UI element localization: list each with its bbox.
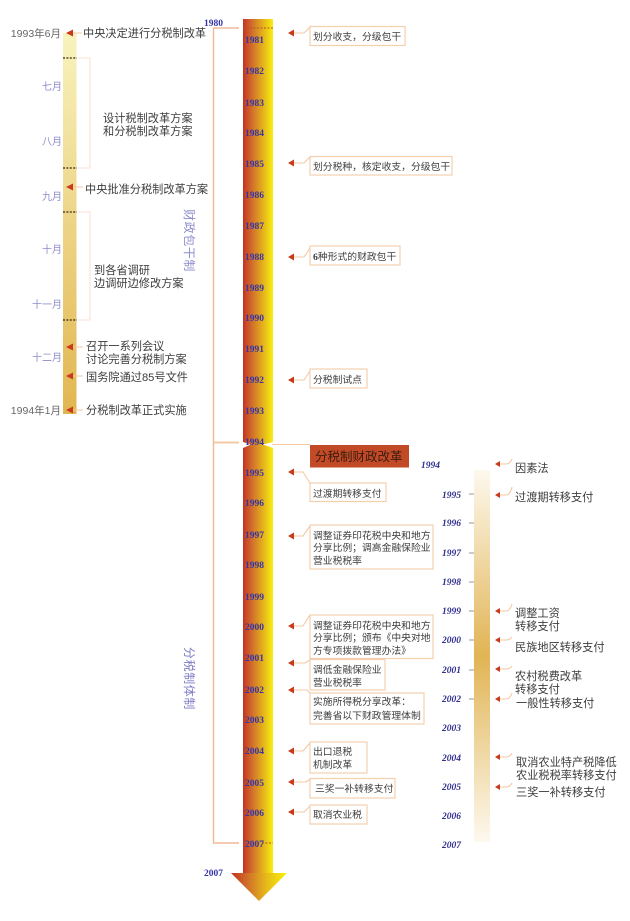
left date labels: 七月 [42,81,62,93]
main timeline year labels: 1982 [245,67,264,77]
left date labels: 1993年6月 [11,27,61,40]
callout: 2000: 调整证券印花税中央和地方 [313,619,431,632]
main timeline arrow [231,19,287,901]
heading: 分税制财政改革 [310,445,409,468]
callout: 1995 [310,483,386,502]
main timeline year labels: 1989 [245,284,264,294]
main timeline year labels: 1984 [245,129,264,139]
callout: 2002: 实施所得税分享改革： [313,695,411,708]
left date labels: 九月 [42,191,62,203]
right event texts [515,461,617,799]
callout: 1995: 过渡期转移支付 [313,487,382,500]
left event texts [83,26,208,417]
main timeline year labels: 2003 [245,716,264,726]
right event texts: 调整工资 [515,606,560,620]
left event texts: 国务院通过85号文件 [86,370,188,384]
callout: 1981 [310,26,405,46]
right timeline year labels: 1996 [442,519,461,529]
right timeline year labels: 1995 [442,491,461,501]
callout: 2000: 方专项拨款管理办法》 [313,644,411,657]
right timeline year labels: 2006 [441,812,461,822]
callout: 1988 [310,246,400,265]
main timeline year labels: 2002 [245,686,264,696]
era bracket [214,28,239,843]
callout: 1997 [310,525,433,569]
main timeline year labels: 2000 [245,623,264,633]
callout: 1985: 划分税种，核定收支，分级包干 [313,160,450,173]
left event texts: 分税制改革正式实施 [86,403,187,417]
era label: 财政包干制: 财政包干制 [182,209,196,272]
left event texts: 到各省调研 [94,263,150,277]
main timeline year labels: 1980 [204,19,223,29]
main timeline year labels: 1981 [245,36,264,46]
main timeline year labels: 2007 [204,869,223,879]
left event markers [66,30,83,414]
callout: 2004 [310,742,367,773]
left event texts: 和分税制改革方案 [103,124,193,138]
left date labels: 1994年1月 [11,404,61,417]
main timeline year labels: 2007 [245,840,264,850]
left date labels: 十二月 [32,351,62,364]
right timeline year labels: 2007 [441,841,462,851]
right timeline year labels: 2002 [441,695,461,705]
right timeline year labels: 2005 [441,783,461,793]
right timeline year labels: 2003 [441,724,461,734]
main timeline year labels: 1987 [245,222,264,232]
main timeline year labels: 1995 [245,469,264,479]
right timeline year labels: 1994 [421,461,440,471]
callout: 1992 [310,369,367,388]
left timeline bar: 1993-1994 [63,33,77,414]
right event texts: 取消农业特产税降低 [516,755,617,769]
callout: 2001: 调低金融保险业 [313,663,382,676]
right event texts: 一般性转移支付 [516,696,594,710]
main timeline year labels: 1988 [245,253,264,263]
era label: 分税制体制: 分税制体制 [182,647,196,710]
callout: 2001: 营业税税率 [313,676,362,689]
main timeline year labels: 1996 [245,499,264,509]
callout: 2005: 三奖一补转移支付 [315,782,394,795]
callout: 1985 [310,156,452,175]
right event texts: 因素法 [515,461,549,475]
main timeline year labels: 1983 [245,99,264,109]
main timeline year labels [204,19,264,879]
main timeline year labels: 2006 [245,809,264,819]
callout: 1997: 分享比例；调高金融保险业 [313,541,431,554]
right timeline year labels: 2004 [441,754,461,764]
main timeline year labels: 1998 [245,561,264,571]
callout: 2006 [310,805,367,824]
left date labels [11,27,62,417]
callout: 2006: 取消农业税 [313,808,362,821]
callout: 1997: 营业税税率 [313,554,362,567]
left date labels: 八月 [42,136,62,148]
left date labels: 十月 [42,243,62,256]
main timeline year labels: 2005 [245,779,264,789]
callout: 2000 [310,615,433,658]
main timeline year labels: 1992 [245,376,264,386]
left event texts: 中央决定进行分税制改革 [83,26,206,40]
callout leaders [272,27,310,816]
main timeline year labels: 1999 [245,593,264,603]
left event texts: 中央批准分税制改革方案 [85,182,208,196]
right event texts: 过渡期转移支付 [515,490,593,504]
right event texts: 转移支付 [515,619,560,633]
right timeline year labels: 1998 [442,578,461,588]
right event texts: 三奖一补转移支付 [516,785,606,799]
main timeline year labels: 2004 [245,747,264,757]
main timeline year labels: 1997 [245,531,264,541]
callout: 1992: 分税制试点 [313,373,362,386]
left event texts: 召开一系列会议 [86,339,164,353]
right timeline bar [469,470,490,842]
callout: 2001 [310,660,385,690]
left brackets [78,58,90,320]
right timeline year labels: 1999 [442,607,461,617]
right event texts: 转移支付 [515,682,560,696]
main timeline year labels: 1985 [245,160,264,170]
callout: 2005 [310,778,395,798]
right event markers [495,459,512,790]
main timeline year labels: 1993 [245,407,264,417]
callout: 2002 [310,693,424,724]
left event texts: 设计税制改革方案 [103,111,193,125]
left event texts: 边调研边修改方案 [94,276,184,290]
callout: 2002: 完善省以下财政管理体制 [313,709,421,722]
left event texts: 讨论完善分税制方案 [86,352,187,366]
left date labels: 十一月 [32,298,62,311]
callout: 2004: 机制改革 [313,758,352,771]
main timeline year labels: 1994 [245,438,264,448]
right timeline year labels: 2000 [441,636,461,646]
right event texts: 农业税税率转移支付 [516,768,617,782]
callout: 2000: 分享比例；颁布《中央对地 [313,631,431,644]
right timeline year labels [421,461,462,851]
right event texts: 民族地区转移支付 [515,640,605,654]
main timeline year labels: 1986 [245,191,264,201]
right timeline year labels: 1997 [442,549,462,559]
main timeline year labels: 1990 [245,314,264,324]
callout: 1988: 6种形式的财政包干 [313,250,396,263]
heading: 分税制财政改革: 分税制财政改革 [315,450,403,464]
main timeline year labels: 2001 [245,654,264,664]
main timeline year labels: 1991 [245,345,264,355]
callout: 1997: 调整证券印花税中央和地方 [313,529,431,542]
callout: 2004: 出口退税 [313,745,352,758]
callout: 1981: 划分收支，分级包干 [313,30,401,43]
right timeline year labels: 2001 [441,666,461,676]
right event texts: 农村税费改革 [515,669,582,683]
